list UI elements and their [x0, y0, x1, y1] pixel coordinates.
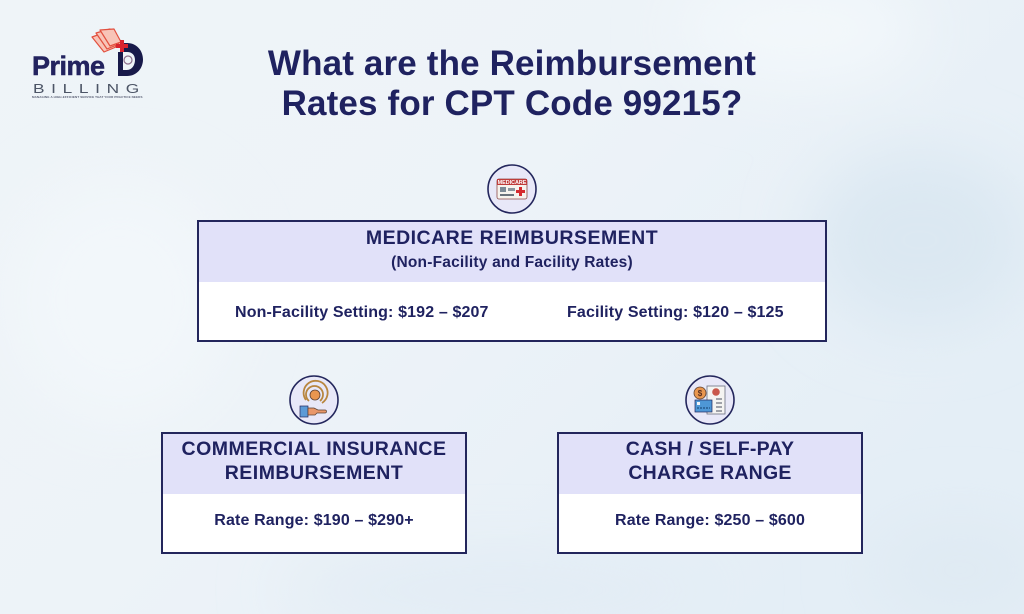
panel header: cash / self-pay [559, 434, 861, 494]
logo wordmark: Billing: BILLING [33, 81, 146, 96]
icon: red cards, cross and D [91, 28, 143, 76]
logo tagline: MANAGING A HIGH-EFFICIENT SERVICE THAT YOUR PRACTICE NEEDS [32, 95, 143, 99]
logo wordmark: Prime: Prime [32, 51, 105, 81]
panel: commercial insurance [161, 432, 467, 554]
heading: cash self-pay charge range: CHARGE RANGE [628, 462, 792, 484]
heading: cash self-pay charge range [626, 438, 794, 484]
title: Rates for CPT Code 99215? [282, 84, 742, 122]
panel header: commercial insurance [163, 434, 465, 494]
heading: cash self-pay charge range: CASH / SELF-PAY [626, 438, 794, 460]
panel: cash / self-pay [557, 432, 863, 554]
panel: medicare reimbursement [197, 220, 827, 342]
text: cash rate range: Rate Range: $250 – $600 [615, 512, 805, 529]
panel header: medicare [199, 222, 825, 282]
heading: medicare reimbursement: MEDICARE REIMBURSEMENT [366, 227, 658, 249]
icon: medicare card [487, 164, 537, 214]
icon: cash and card bill: $ [698, 389, 703, 398]
subheading: rate types: (Non-Facility and Facility Rates) [391, 254, 633, 271]
heading: commercial insurance reimbursement [182, 438, 446, 484]
text: commercial rate range: Rate Range: $190 – $290+ [214, 512, 414, 529]
title: What are the Reimbursement [268, 44, 756, 83]
title [268, 44, 756, 122]
logo: PrimeD Billing [32, 28, 146, 99]
icon: medicare card: MEDICARE [498, 180, 527, 186]
icon: hand with coin [289, 375, 339, 425]
text: facility rate: Facility Setting: $120 – $125 [567, 304, 784, 321]
icon: cash and card bill [685, 375, 735, 425]
text: non-facility rate: Non-Facility Setting: $192 – $207 [235, 304, 489, 321]
heading: commercial insurance reimbursement: REIMBURSEMENT [225, 462, 403, 484]
heading: commercial insurance reimbursement: COMMERCIAL INSURANCE [182, 438, 446, 460]
